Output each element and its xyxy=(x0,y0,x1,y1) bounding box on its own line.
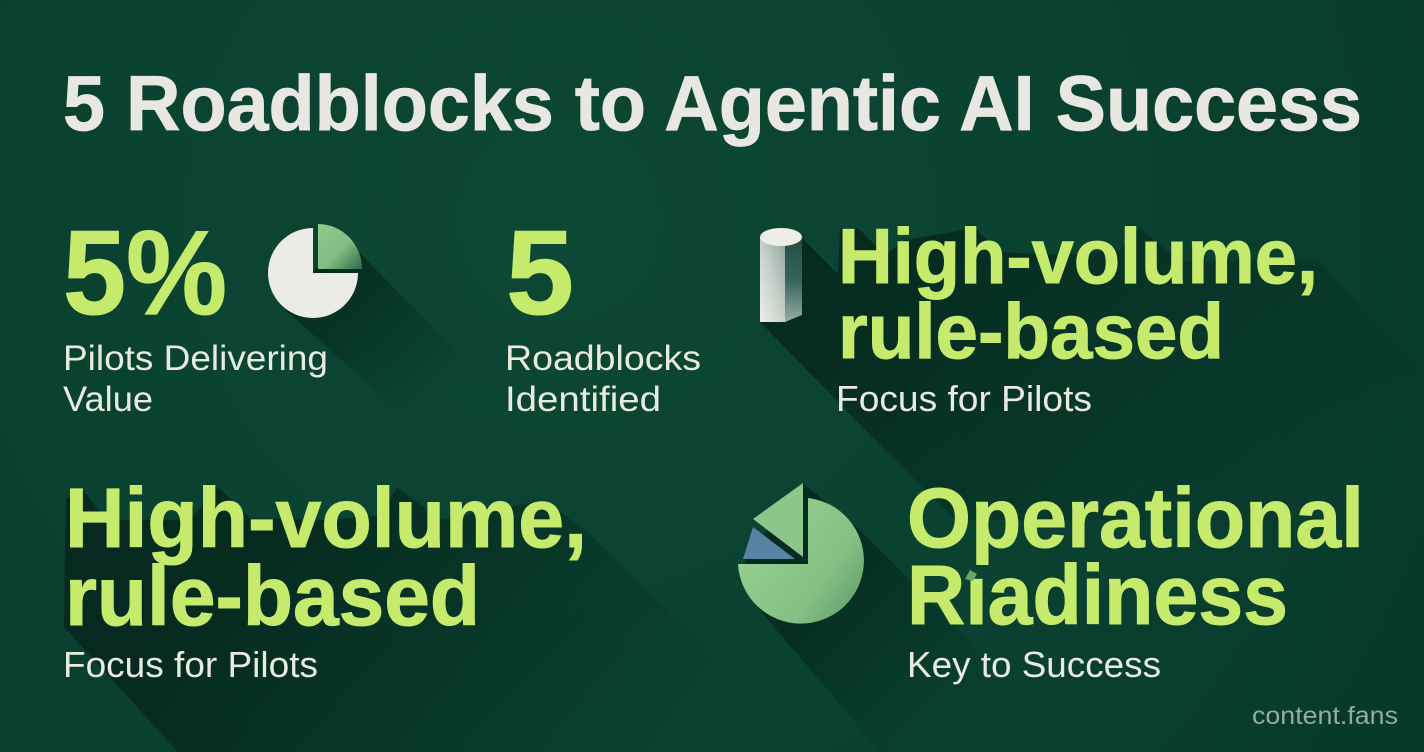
heading: Rıadiness xyxy=(907,548,1288,642)
icon: pie chart with one quarter offset xyxy=(268,224,362,318)
icon: leaf-shaped i dot xyxy=(965,570,977,581)
panel: 5% pilots stat xyxy=(63,206,480,430)
text long shadow xyxy=(64,487,730,752)
title: 5 Roadblocks to Agentic AI Success xyxy=(63,59,1362,147)
icon long shadow xyxy=(745,483,1010,752)
panel: operational readiness xyxy=(738,471,1364,752)
text and icon long shadow xyxy=(760,228,1424,520)
stat label: Identified xyxy=(505,380,661,419)
stat number: 5: 5 xyxy=(506,206,574,340)
heading: Operational xyxy=(907,471,1364,565)
watermark: content.fans xyxy=(1252,702,1398,730)
panel: 5 roadblocks stat xyxy=(505,206,701,419)
icon: cylinder xyxy=(760,228,802,322)
panel: high-volume focus, bottom xyxy=(63,471,730,752)
heading: High-volume, xyxy=(838,212,1318,300)
stat label: Roadblocks xyxy=(505,339,701,378)
icon shadow: pie chart xyxy=(281,238,480,430)
icon: pie chart with separated slices xyxy=(738,483,864,624)
label: Key to Success xyxy=(907,644,1161,685)
heading: rule-based xyxy=(65,549,480,643)
stat number: 5%: 5% xyxy=(63,206,227,340)
stat label: Pilots Delivering xyxy=(63,339,328,378)
panel: high-volume focus, top xyxy=(760,212,1424,520)
label: Focus for Pilots xyxy=(836,378,1092,419)
label: Focus for Pilots xyxy=(63,644,318,685)
stat label: Value xyxy=(63,380,153,419)
heading: High-volume, xyxy=(65,471,587,565)
heading: rule-based xyxy=(838,287,1224,375)
